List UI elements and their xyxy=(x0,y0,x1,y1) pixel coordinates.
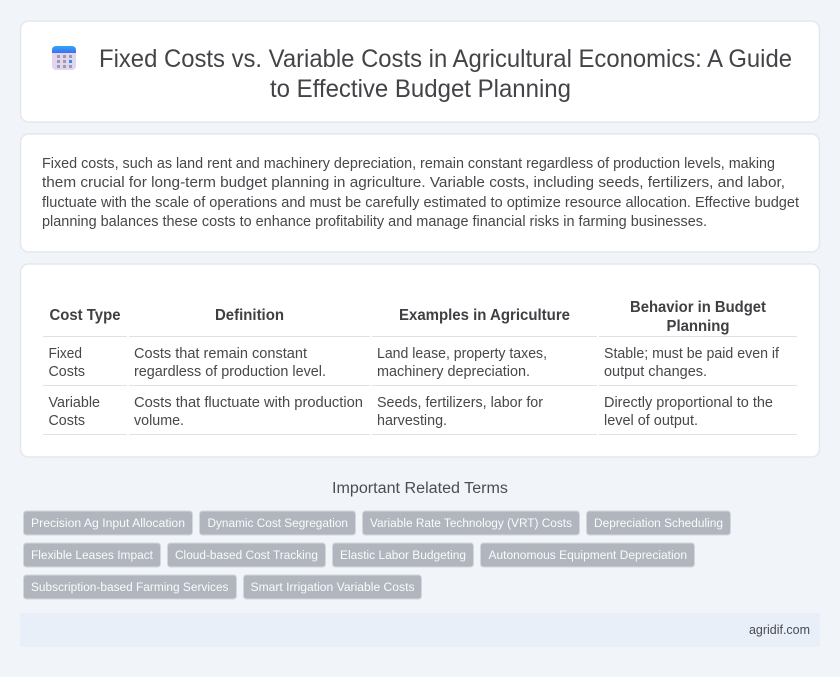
icon: calendar xyxy=(52,46,76,70)
related term tags: Cloud-based Cost Tracking xyxy=(175,548,318,562)
table header row: Cost Type xyxy=(50,307,121,324)
title: to Effective Budget Planning xyxy=(270,75,571,103)
table row: variable costs: volume. xyxy=(134,413,184,429)
table row: variable costs: Variable xyxy=(48,395,100,411)
footer bar xyxy=(20,613,820,647)
related term tags: Subscription-based Farming Services xyxy=(31,580,228,594)
related term tags: Precision Ag Input Allocation xyxy=(31,516,185,530)
table header row: Examples in Agriculture xyxy=(399,307,570,324)
table row: fixed costs: Costs xyxy=(48,364,85,380)
table row: fixed costs: regardless of production level. xyxy=(134,364,326,380)
table row: variable costs: level of output. xyxy=(604,413,698,429)
table row: fixed costs: Costs that remain constant xyxy=(134,346,307,362)
panel: introduction text: planning balances these costs to enhance profitability and manage financial risks in farming businesses. xyxy=(42,214,707,230)
table row: variable costs: Costs that fluctuate with production xyxy=(134,395,363,411)
related term tags xyxy=(24,511,730,599)
related term tags: Autonomous Equipment Depreciation xyxy=(488,548,687,562)
header panel xyxy=(20,21,820,122)
table row: variable costs: Seeds, fertilizers, labor for xyxy=(377,395,543,411)
related term tags: Variable Rate Technology (VRT) Costs xyxy=(370,516,572,530)
table header row xyxy=(50,299,767,335)
title xyxy=(99,45,792,103)
table row: fixed costs xyxy=(48,346,779,380)
table header row: Behavior in Budget xyxy=(630,299,767,316)
panel: introduction text: Fixed costs, such as land rent and machinery depreciation, remain constant regardless of production levels, making xyxy=(42,156,775,172)
panel: introduction text: fluctuate with the scale of operations and must be carefully estimated to optimize resource allocation. Effective budget xyxy=(42,195,799,211)
table row: fixed costs: machinery depreciation. xyxy=(377,364,530,380)
heading: important related terms: Important Related Terms xyxy=(332,480,508,497)
footer bar: agridif.com xyxy=(749,623,810,637)
table header row: Planning xyxy=(666,318,730,335)
table row: fixed costs: output changes. xyxy=(604,364,707,380)
table row: variable costs: Directly proportional to the xyxy=(604,395,773,411)
title: Fixed Costs vs. Variable Costs in Agricultural Economics: A Guide xyxy=(99,45,792,73)
related term tags: Dynamic Cost Segregation xyxy=(208,516,348,530)
related term tags: Smart Irrigation Variable Costs xyxy=(250,580,414,594)
related term tags: Flexible Leases Impact xyxy=(31,548,154,562)
table row: variable costs xyxy=(48,395,773,429)
table row: fixed costs: Fixed xyxy=(48,346,82,362)
panel: introduction text xyxy=(20,134,820,252)
table row: variable costs: Costs xyxy=(48,413,85,429)
table header row: Definition xyxy=(215,307,284,324)
panel: introduction text: them crucial for long-term budget planning in agriculture. Variable costs, including seeds, fertilizers, and labor, xyxy=(42,175,785,191)
table row: variable costs: harvesting. xyxy=(377,413,447,429)
related term tags: Depreciation Scheduling xyxy=(594,516,723,530)
related term tags: Elastic Labor Budgeting xyxy=(340,548,466,562)
table row: fixed costs: Stable; must be paid even if xyxy=(604,346,779,362)
panel: comparison table xyxy=(20,264,820,457)
table row: fixed costs: Land lease, property taxes, xyxy=(377,346,547,362)
